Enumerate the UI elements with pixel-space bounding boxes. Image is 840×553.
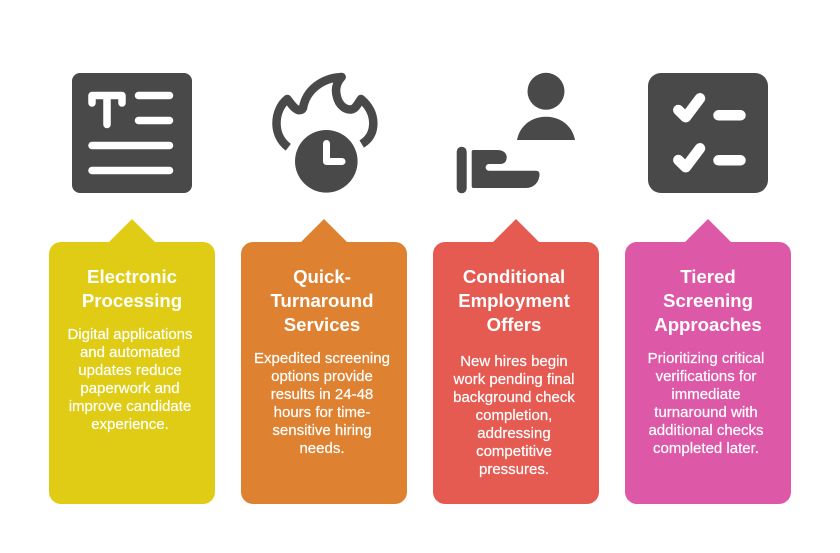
text: Quick-Turnaround Services description: results in 24-48 xyxy=(271,386,373,403)
text: Tiered Screening Approaches description: turnaround with xyxy=(654,404,758,421)
text: Electronic Processing description: improve candidate xyxy=(69,398,191,415)
heading: Conditional Employment Offers: Employment xyxy=(458,290,570,311)
heading: Quick-Turnaround Services: Services xyxy=(284,314,360,335)
heading: Electronic Processing: Processing xyxy=(82,290,182,311)
text: Electronic Processing description: paperwork and xyxy=(80,380,180,397)
heading: Conditional Employment Offers: Offers xyxy=(487,314,541,335)
heading: Quick-Turnaround Services: Quick- xyxy=(293,266,351,287)
text: Tiered Screening Approaches description: additional checks xyxy=(648,422,764,439)
heading: Quick-Turnaround Services: Turnaround xyxy=(271,290,373,311)
text: Conditional Employment Offers description: pressures. xyxy=(479,461,549,478)
text: Conditional Employment Offers description: work pending final xyxy=(453,371,574,388)
heading: Tiered Screening Approaches: Screening xyxy=(663,290,753,311)
text: Quick-Turnaround Services description: Expedited screening xyxy=(254,350,390,367)
text: Tiered Screening Approaches description: completed later. xyxy=(653,440,759,457)
heading: Tiered Screening Approaches: Tiered xyxy=(680,266,736,287)
panel: Electronic Processing xyxy=(49,219,215,504)
panel: Tiered Screening Approaches xyxy=(625,219,791,504)
text: Conditional Employment Offers description: completion, xyxy=(476,407,552,424)
text: Quick-Turnaround Services description: needs. xyxy=(299,440,345,457)
text: Electronic Processing description: Digital applications xyxy=(67,326,193,343)
text: Conditional Employment Offers description: background check xyxy=(453,389,575,406)
text: Conditional Employment Offers description: New hires begin xyxy=(460,353,568,370)
panel: Conditional Employment Offers xyxy=(433,219,599,504)
text: Electronic Processing description: experience. xyxy=(91,416,169,433)
heading: Tiered Screening Approaches: Approaches xyxy=(654,314,762,335)
icon: checklist xyxy=(648,73,768,193)
heading: Electronic Processing: Electronic xyxy=(87,266,177,287)
text: Quick-Turnaround Services description: options provide xyxy=(271,368,373,385)
text: Quick-Turnaround Services description: sensitive hiring xyxy=(272,422,372,439)
icon: flame with clock xyxy=(276,77,373,193)
icon: text document xyxy=(72,73,192,193)
text: Tiered Screening Approaches description: verifications for xyxy=(656,368,756,385)
text: Quick-Turnaround Services description: hours for time- xyxy=(274,404,370,421)
heading: Conditional Employment Offers: Conditional xyxy=(463,266,565,287)
text: Conditional Employment Offers description: competitive xyxy=(476,443,552,460)
text: Tiered Screening Approaches description: Prioritizing critical xyxy=(648,350,764,367)
text: Tiered Screening Approaches description: immediate xyxy=(671,386,741,403)
icon: hand offering person xyxy=(457,73,575,193)
text: Conditional Employment Offers description: addressing xyxy=(477,425,551,442)
panel: Quick-Turnaround Services xyxy=(241,219,407,504)
text: Electronic Processing description: updates reduce xyxy=(78,362,182,379)
text: Electronic Processing description: and automated xyxy=(80,344,180,361)
